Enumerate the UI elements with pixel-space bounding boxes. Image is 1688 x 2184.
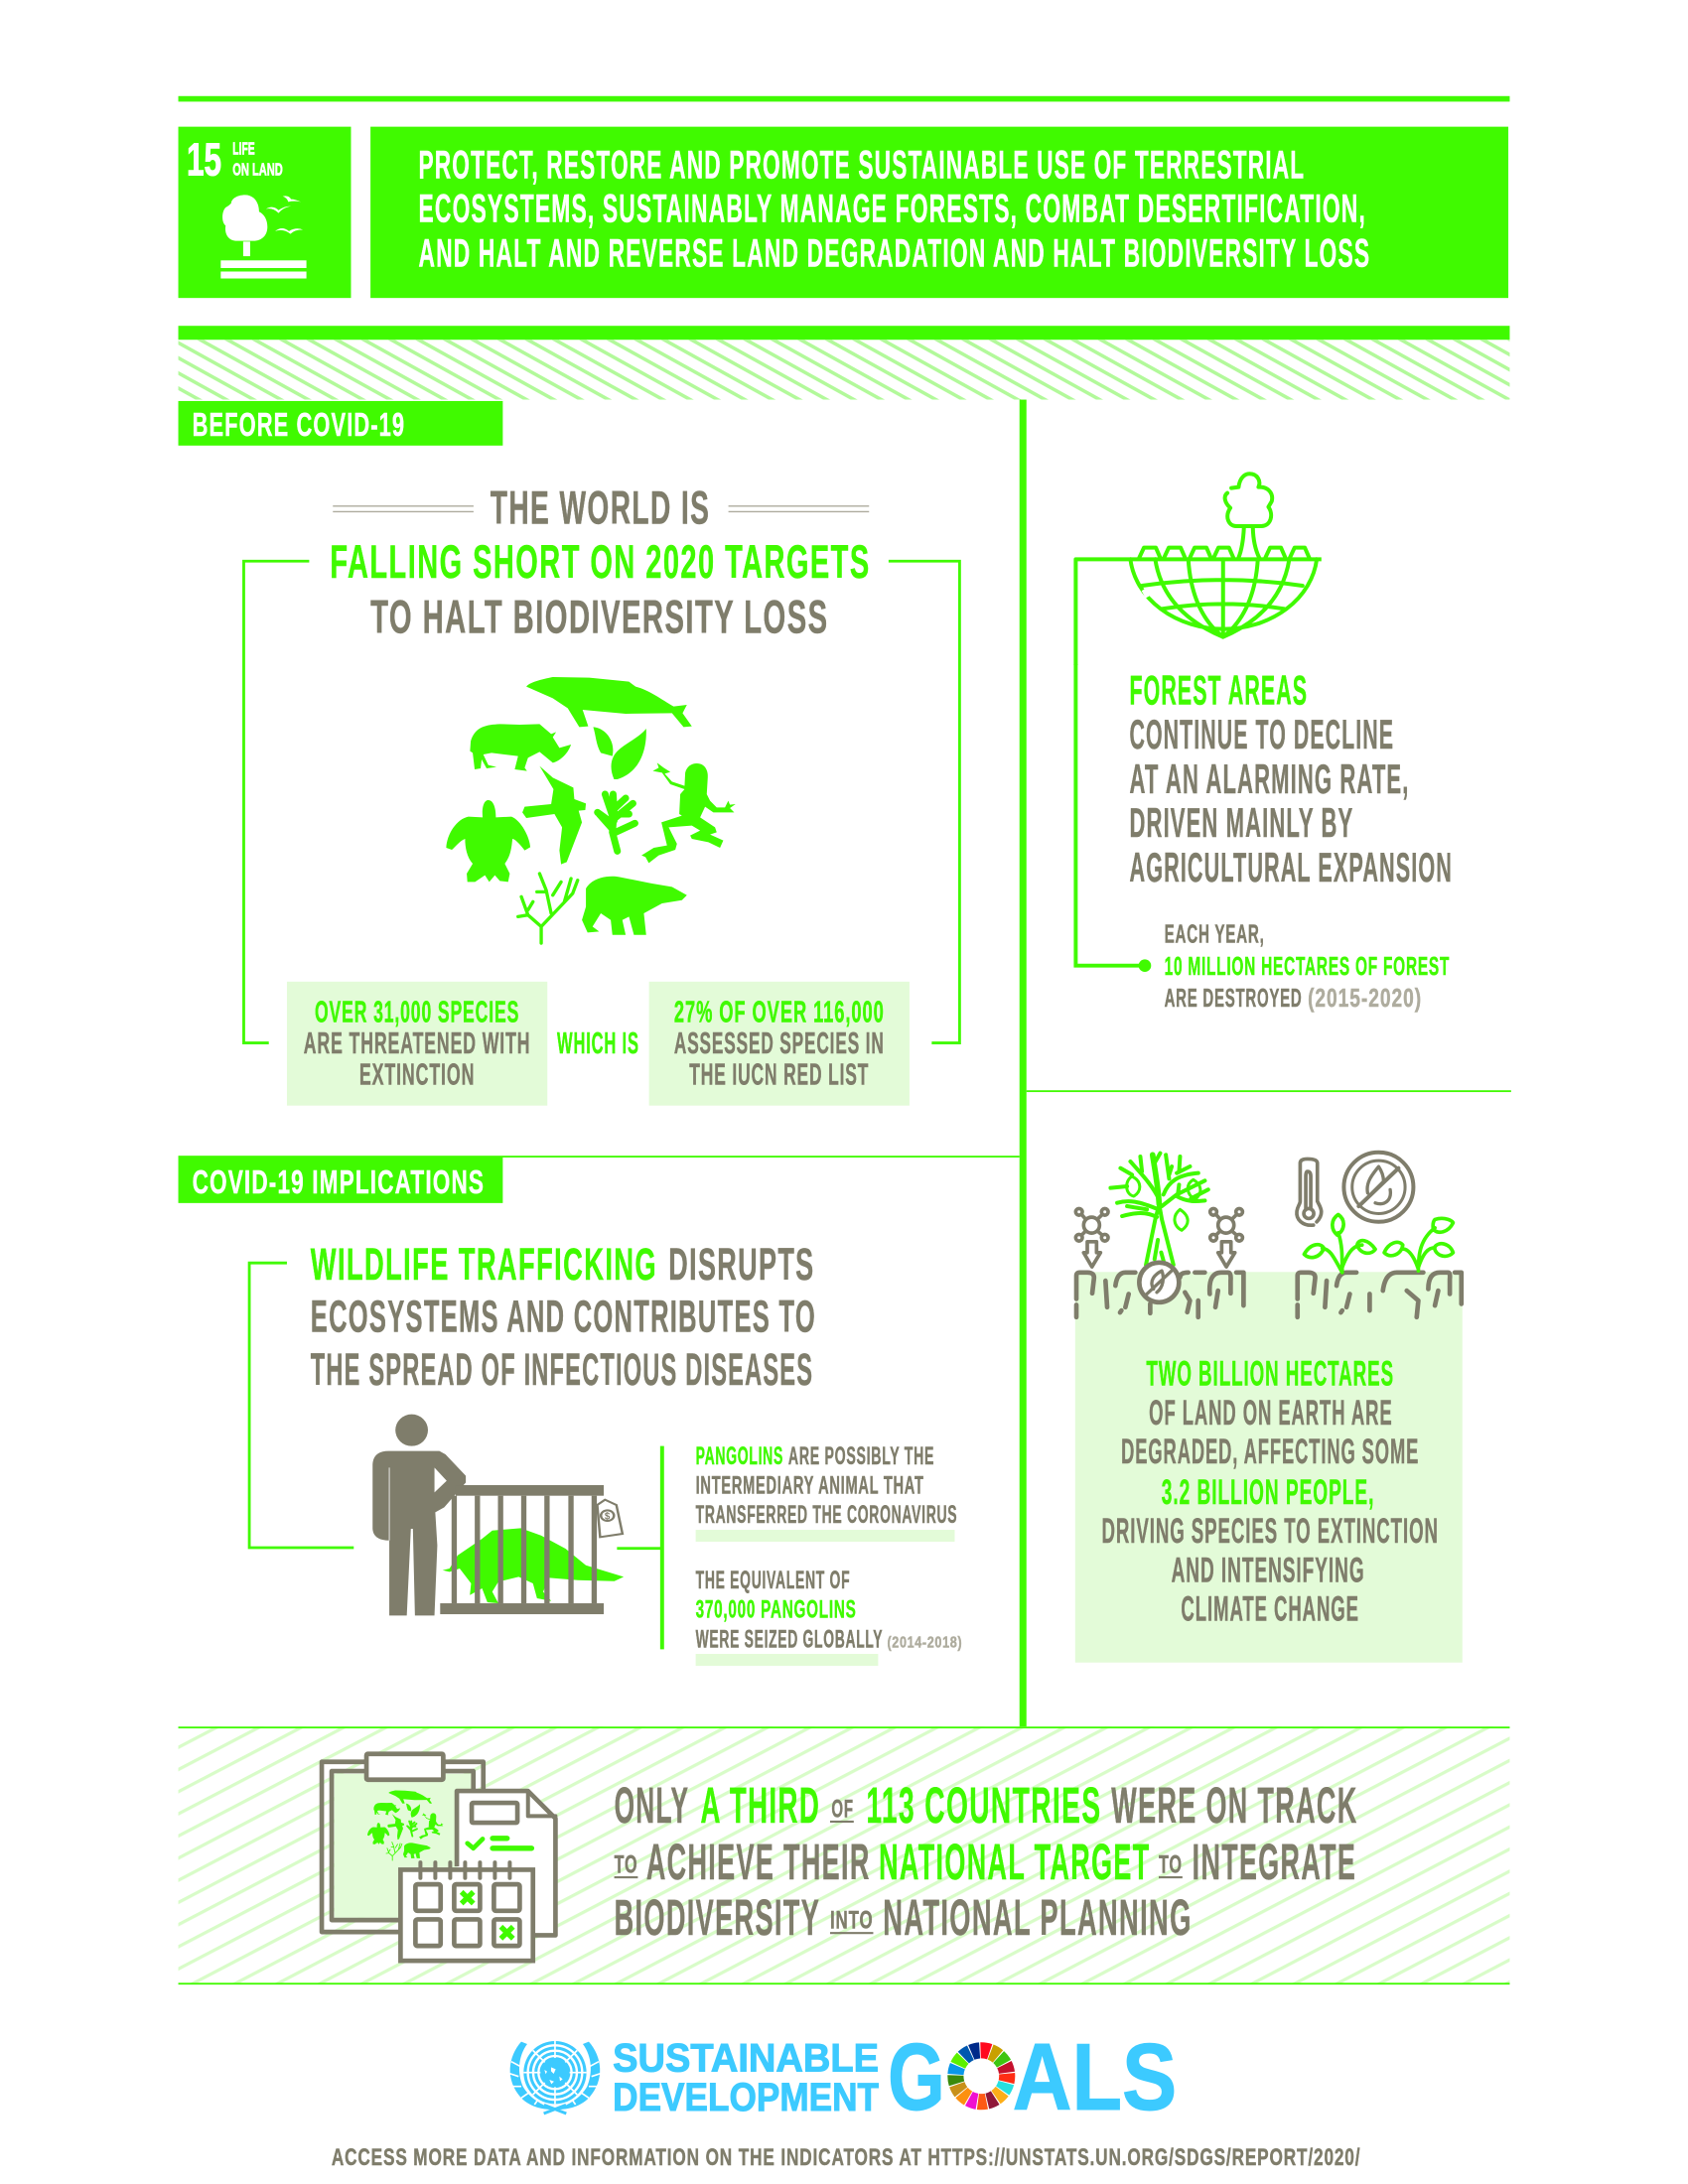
wordmark: sustainable development: DEVELOPMENT <box>613 2076 879 2119</box>
soil right <box>1298 1273 1462 1317</box>
text: pangolins seized: 370,000 PANGOLINS <box>696 1595 857 1623</box>
panel: land degradation <box>1075 1153 1463 1663</box>
callout: threatened species count <box>287 982 547 1106</box>
logo: sustainable development goals <box>508 2025 1177 2130</box>
which is connector: WHICH IS <box>557 1027 639 1060</box>
icon: tree on globe <box>1075 474 1322 665</box>
whale <box>526 677 692 727</box>
goal 15 icon tile <box>179 127 351 298</box>
heading: wildlife trafficking <box>311 1239 816 1395</box>
heading: falling short on targets <box>330 480 871 642</box>
text: hectares destroyed per year: 10 MILLION HECTARES OF FOREST <box>1165 953 1450 981</box>
background box <box>1075 1272 1463 1663</box>
polar bear <box>582 877 687 935</box>
leader line with dot <box>1075 664 1151 972</box>
goal name <box>232 139 283 180</box>
text: forest areas decline: CONTINUE TO DECLINE <box>1130 711 1394 757</box>
turtle <box>446 800 530 882</box>
text: countries on track: NATIONAL PLANNING <box>883 1889 1193 1946</box>
text: countries on track: WERE ON TRACK <box>1111 1777 1358 1834</box>
section label: before covid-19: BEFORE COVID-19 <box>193 407 405 444</box>
icon: un emblem <box>508 2041 602 2114</box>
callout: red list share: THE IUCN RED LIST <box>689 1059 869 1092</box>
text: countries on track: TO <box>615 1851 637 1879</box>
soil left <box>1076 1273 1243 1317</box>
text: pangolins seized <box>696 1567 962 1666</box>
text: countries on track: INTO <box>830 1907 873 1935</box>
wordmark: sustainable development <box>613 2037 879 2119</box>
calendar <box>400 1862 533 1961</box>
thermometer <box>1297 1159 1322 1225</box>
text: countries on track: BIODIVERSITY <box>615 1889 820 1946</box>
top rule <box>179 96 1509 101</box>
text: pangolins seized: WERE SEIZED GLOBALLY <box>696 1625 883 1653</box>
icon: clipboard, document and calendar <box>322 1754 555 1961</box>
text: forest areas decline <box>1130 667 1453 890</box>
no-water sign <box>1343 1153 1413 1222</box>
text: two billion hectares: 3.2 BILLION PEOPLE, <box>1162 1473 1374 1512</box>
leaves <box>593 727 646 779</box>
header banner <box>370 127 1508 298</box>
heading: wildlife trafficking: ECOSYSTEMS AND CONTRIBUTES TO <box>311 1292 816 1342</box>
text: forest areas decline: FOREST AREAS <box>1130 667 1308 714</box>
text: two billion hectares: TWO BILLION HECTARES <box>1146 1355 1394 1394</box>
wordmark: goals: ALS <box>1013 2025 1177 2130</box>
wordmark: sustainable development: SUSTAINABLE <box>613 2037 879 2081</box>
text: countries on track <box>615 1777 1358 1946</box>
text: pangolins as intermediary: TRANSFERRED THE CORONAVIRUS <box>696 1501 957 1529</box>
dead tree <box>1110 1154 1208 1265</box>
heading: wildlife trafficking: THE SPREAD OF INFECTIOUS DISEASES <box>311 1344 813 1395</box>
section label: covid-19 implications <box>179 1158 502 1203</box>
callout: threatened species count: EXTINCTION <box>359 1059 475 1092</box>
text: forest areas decline: DRIVEN MAINLY BY <box>1130 799 1353 846</box>
wordmark: goals <box>888 2025 1177 2130</box>
callout: red list share: ASSESSED SPECIES IN <box>674 1027 885 1060</box>
icon: tree and birds <box>220 195 307 279</box>
wordmark: goals: G <box>888 2025 945 2130</box>
price tag dollar sign: $ <box>605 1511 611 1522</box>
text: two billion hectares <box>1101 1355 1439 1629</box>
molecules and arrows <box>1075 1208 1242 1267</box>
text: pangolins as intermediary: INTERMEDIARY ANIMAL THAT <box>696 1471 924 1499</box>
hatched band <box>179 1726 1509 1984</box>
heading: wildlife trafficking: DISRUPTS <box>668 1239 815 1290</box>
panel: forest areas <box>1075 474 1453 1013</box>
text: countries on track: 113 COUNTRIES <box>866 1777 1101 1834</box>
text: hectares destroyed per year <box>1165 921 1450 1013</box>
text: countries on track: INTEGRATE <box>1193 1834 1356 1890</box>
text: pangolins as intermediary <box>696 1442 957 1542</box>
text: forest areas decline: AT AN ALARMING RATE, <box>1130 755 1409 802</box>
pangolin <box>443 1528 624 1603</box>
heading: wildlife trafficking: WILDLIFE TRAFFICKING <box>311 1239 657 1290</box>
panel: national planning <box>179 1726 1509 1984</box>
mini species cluster <box>367 1791 444 1860</box>
text: pangolins as intermediary: ARE POSSIBLY THE <box>788 1442 934 1470</box>
panel: wildlife trafficking <box>249 1239 962 1666</box>
text: hectares destroyed per year: ARE DESTROYED <box>1165 985 1302 1013</box>
seaweed <box>598 794 634 851</box>
text: pangolins as intermediary: PANGOLINS <box>696 1442 783 1470</box>
goal name: LIFE <box>232 139 255 159</box>
text: two billion hectares: DEGRADED, AFFECTING SOME <box>1121 1433 1419 1471</box>
text: countries on track: ACHIEVE THEIR <box>646 1834 871 1890</box>
callout: threatened species count: OVER 31,000 SPECIES <box>315 997 519 1029</box>
text: countries on track: A THIRD <box>701 1777 820 1834</box>
text: two billion hectares: AND INTENSIFYING <box>1172 1551 1365 1589</box>
callout: red list share: 27% OF OVER 116,000 <box>674 997 885 1029</box>
frog <box>641 762 736 863</box>
text: countries on track: OF <box>831 1795 854 1823</box>
text: pangolins seized: THE EQUIVALENT OF <box>696 1567 850 1594</box>
goal number: 15 <box>187 134 221 186</box>
heading: falling short on targets: TO HALT BIODIVERSITY LOSS <box>370 590 829 642</box>
rhino <box>470 724 571 771</box>
goal name: ON LAND <box>232 160 283 180</box>
panel: biodiversity targets <box>243 480 959 1106</box>
heading: falling short on targets: THE WORLD IS <box>491 480 710 533</box>
icon: degraded soil and plants <box>1075 1153 1462 1317</box>
icon: sdg colour wheel <box>955 2050 1007 2102</box>
callout: threatened species count: ARE THREATENED WITH <box>304 1027 530 1060</box>
coral <box>518 874 578 943</box>
text: hectares destroyed per year: (2015-2020) <box>1308 985 1422 1013</box>
seedlings <box>1304 1214 1453 1273</box>
price tag <box>597 1500 623 1537</box>
cage <box>440 1485 604 1614</box>
person <box>372 1415 466 1615</box>
no-leaf sign on soil <box>1139 1263 1179 1302</box>
bird <box>522 766 586 865</box>
text: countries on track: ONLY <box>615 1777 689 1834</box>
text: countries on track: NATIONAL TARGET <box>879 1834 1151 1890</box>
text: countries on track: TO <box>1159 1851 1183 1879</box>
heading: falling short on targets: FALLING SHORT ON 2020 TARGETS <box>330 535 871 588</box>
icon: person with caged pangolin <box>372 1415 624 1615</box>
text: two billion hectares: CLIMATE CHANGE <box>1181 1590 1359 1629</box>
text: pangolins seized: (2014-2018) <box>887 1633 962 1651</box>
document <box>457 1791 555 1935</box>
callout: red list share <box>649 982 910 1106</box>
text: hectares destroyed per year: EACH YEAR, <box>1165 921 1265 949</box>
text: two billion hectares: OF LAND ON EARTH ARE <box>1149 1394 1393 1433</box>
section label: covid-19 implications: COVID-19 IMPLICATIONS <box>193 1164 485 1201</box>
icon: threatened species cluster <box>446 677 736 943</box>
